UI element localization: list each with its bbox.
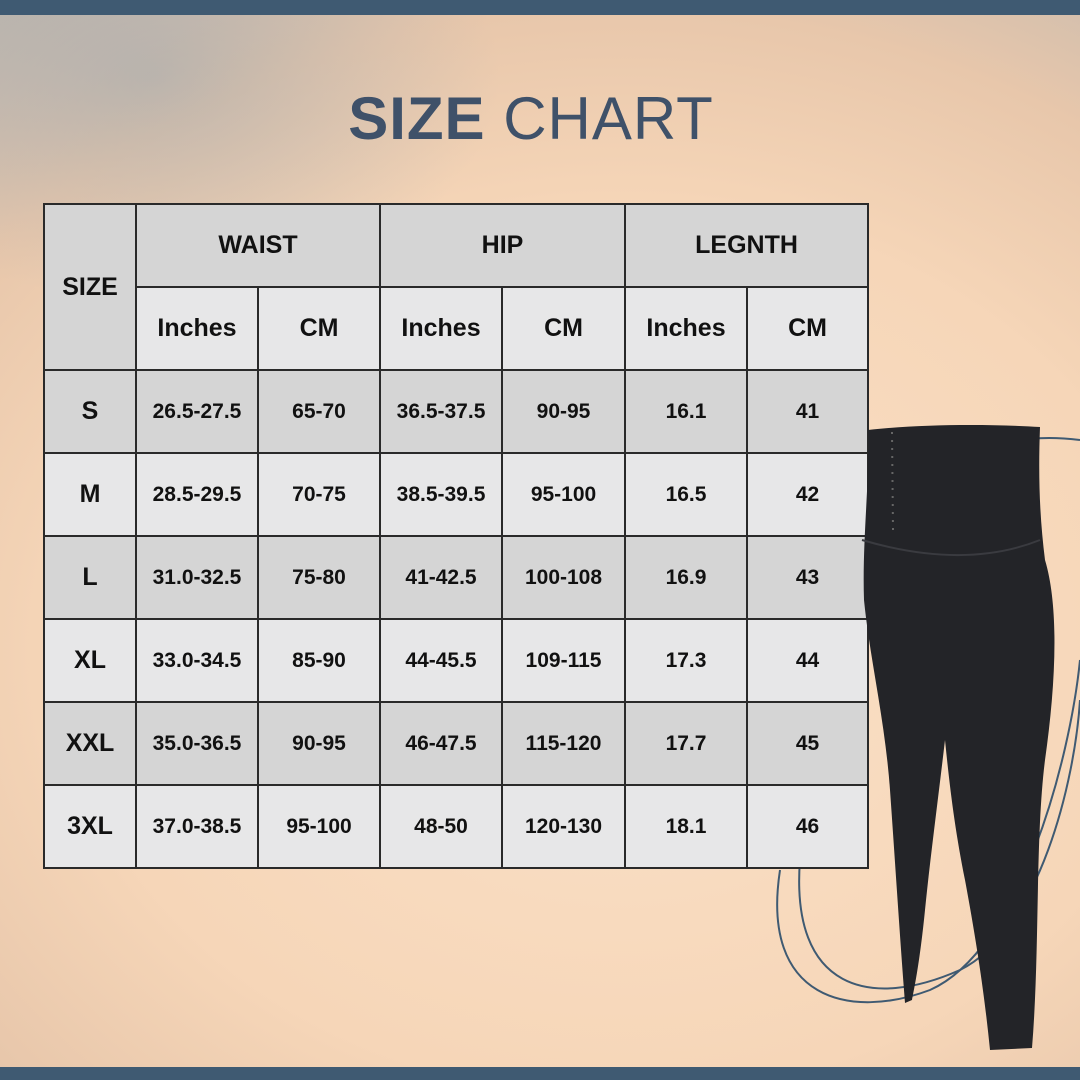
bottom band (0, 1067, 1080, 1080)
size table: 46 (796, 814, 819, 838)
size table: XL (74, 646, 106, 674)
size table: 44-45.5 (405, 648, 477, 672)
size table: 95-100 (286, 814, 352, 838)
size table: 41-42.5 (405, 566, 477, 588)
size table: 120-130 (525, 814, 602, 838)
size table: HIP (482, 231, 523, 259)
size table: 90-95 (537, 400, 590, 422)
size table: 16.1 (666, 400, 706, 422)
size table: 38.5-39.5 (397, 482, 485, 506)
size table: 100-108 (525, 566, 602, 588)
size table: M (80, 480, 100, 508)
size table: SIZE (62, 272, 118, 300)
size table: S (82, 397, 98, 425)
size table: CM (544, 314, 583, 342)
size table: WAIST (218, 231, 298, 259)
title: SIZE CHART (348, 85, 714, 152)
size table (43, 203, 869, 869)
size table: L (82, 563, 98, 591)
size table: 36.5-37.5 (397, 400, 485, 422)
size table: 3XL (67, 812, 113, 840)
size table: 28.5-29.5 (153, 482, 241, 506)
size table: 85-90 (292, 648, 346, 672)
size table: 42 (796, 482, 819, 506)
size table: 17.3 (666, 648, 706, 672)
size table: 43 (796, 566, 819, 588)
size table: Inches (157, 314, 237, 342)
size table: 65-70 (292, 400, 346, 422)
size table: 45 (796, 732, 819, 754)
size table: 26.5-27.5 (153, 400, 241, 422)
size table: 37.0-38.5 (153, 814, 241, 838)
size table: 17.7 (666, 732, 706, 754)
size table: 46-47.5 (405, 732, 477, 754)
size table: 44 (796, 648, 819, 672)
size table: 35.0-36.5 (153, 732, 241, 754)
size table: 115-120 (526, 732, 601, 754)
size table: 33.0-34.5 (153, 648, 241, 672)
size table: 75-80 (292, 566, 346, 588)
size table: Inches (646, 314, 726, 342)
size table: XXL (66, 729, 114, 757)
size table: LEGNTH (695, 231, 798, 259)
size table: CM (788, 314, 827, 342)
size table: 31.0-32.5 (153, 566, 241, 588)
size table: 18.1 (666, 814, 706, 838)
size table: 70-75 (292, 482, 346, 506)
size table: 41 (796, 400, 819, 422)
size table: 16.9 (666, 566, 706, 588)
size table: 95-100 (531, 482, 596, 506)
size table: 109-115 (526, 648, 601, 672)
top band (0, 0, 1080, 15)
size table: 90-95 (292, 732, 346, 754)
size table: CM (300, 314, 338, 342)
haze top-left (0, 0, 500, 300)
size table: Inches (401, 314, 481, 342)
size table: 48-50 (414, 814, 468, 838)
size table: 16.5 (666, 482, 706, 506)
